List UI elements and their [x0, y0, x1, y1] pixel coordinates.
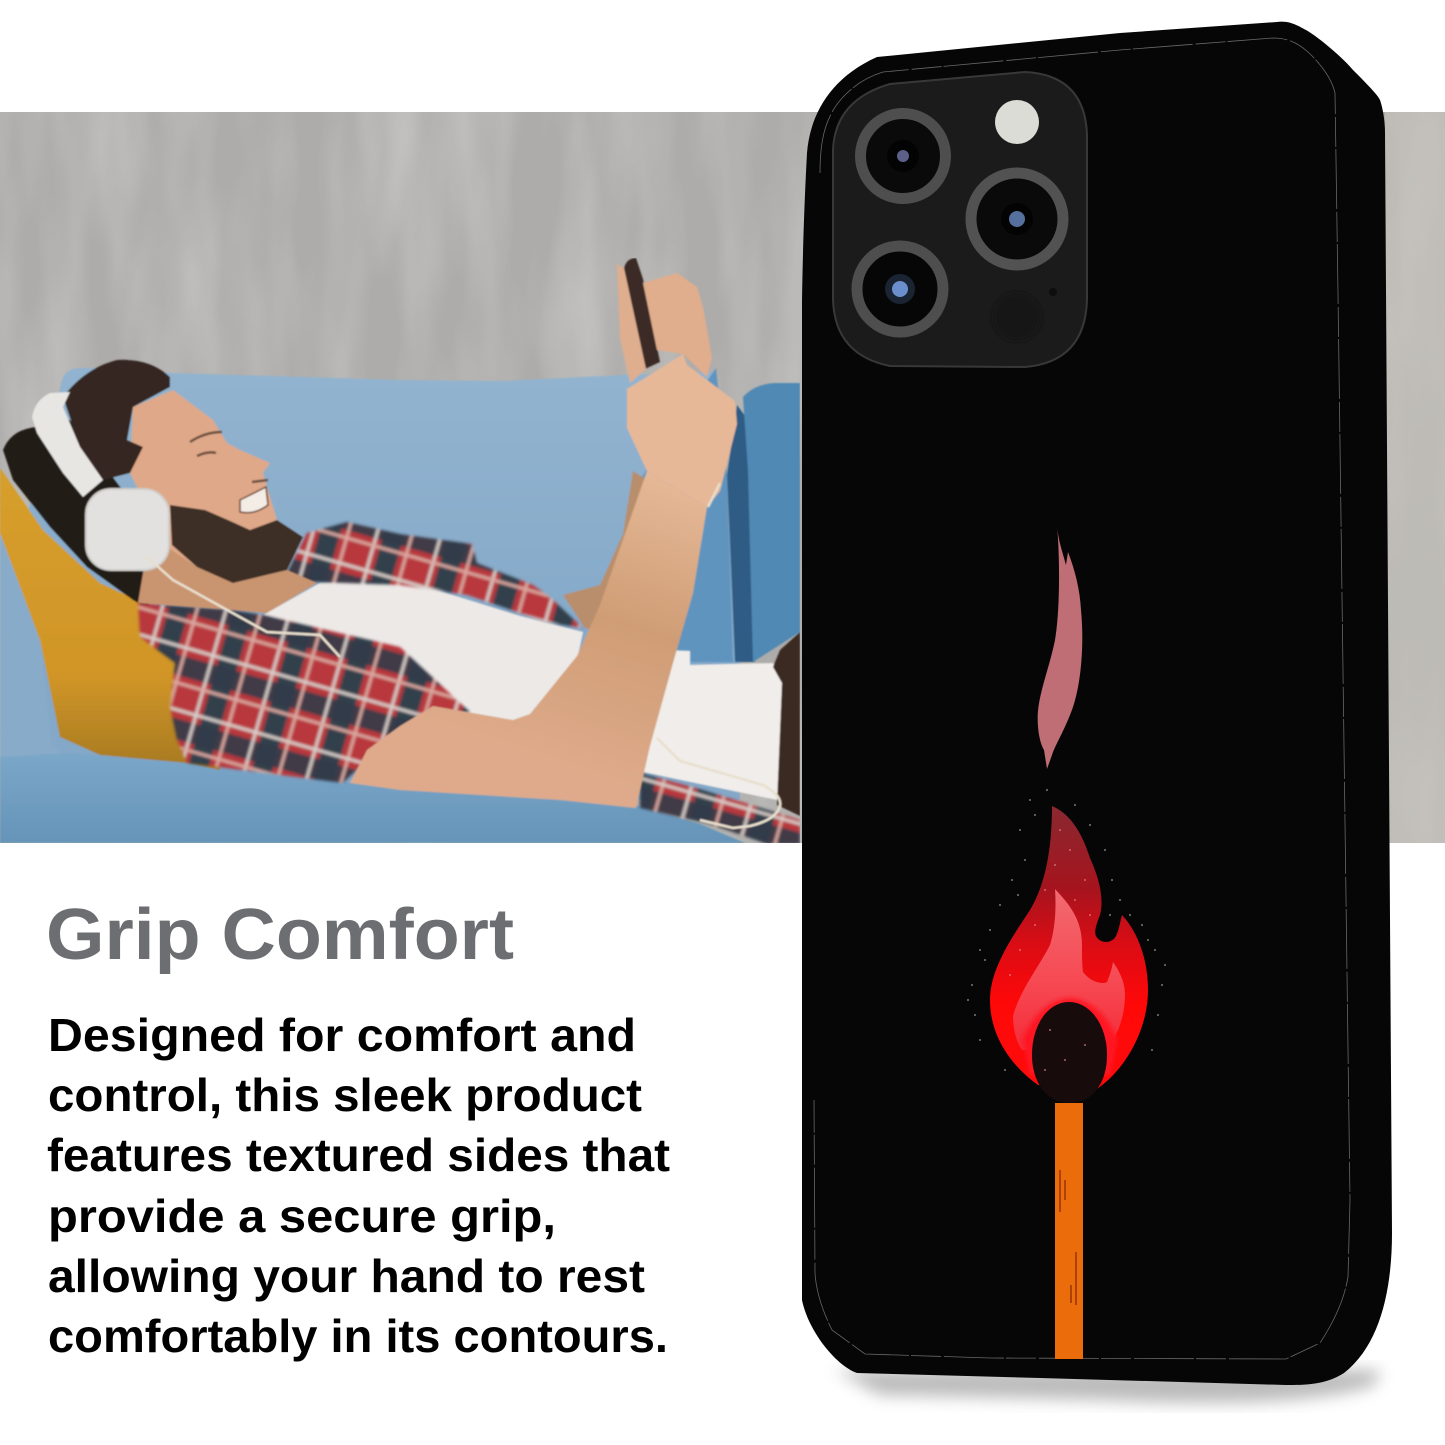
body text: allowing your hand to rest: [48, 1250, 645, 1302]
lens top left: [860, 114, 946, 198]
body text: features textured sides that: [47, 1129, 670, 1181]
lower hand: [627, 354, 737, 507]
sofa arm right: [743, 383, 800, 662]
earphone cable: [147, 483, 780, 828]
hair top: [63, 360, 170, 480]
case body: [802, 22, 1392, 1385]
concrete wall background: [0, 112, 1445, 843]
microphone: [1049, 288, 1057, 296]
white shirt chest: [263, 581, 584, 721]
arm: [350, 471, 707, 808]
lens bottom left: [857, 246, 943, 332]
flash: [995, 100, 1039, 144]
body text: control, this sleek product: [48, 1069, 642, 1121]
stitch outline of back panel: [814, 38, 1350, 1359]
face: [129, 390, 278, 565]
plaid sleeve: [138, 603, 470, 783]
body text: provide a secure grip,: [48, 1190, 556, 1242]
phone case: [802, 22, 1392, 1385]
yellow pillow: [0, 468, 220, 770]
far arm: [562, 470, 645, 630]
camera island: [833, 72, 1087, 367]
sofa side panel: [640, 368, 733, 662]
fingers: [643, 273, 712, 377]
sofa left arm: [0, 534, 14, 618]
neck: [138, 547, 317, 613]
mouth and teeth: [240, 487, 268, 513]
dark trousers: [773, 632, 800, 816]
body text: Designed for comfort and: [48, 1009, 636, 1061]
smoke flame: [1038, 524, 1082, 769]
stick grain marks: [1060, 1170, 1076, 1305]
palm behind phone: [617, 264, 646, 383]
phone in hand: [623, 258, 660, 369]
glow around match head: [1022, 998, 1118, 1075]
seat: [0, 753, 745, 843]
inner pink flame: [1013, 889, 1125, 1050]
plaid collar: [287, 522, 583, 628]
lidar sensor: [993, 293, 1041, 341]
phone case shadow: [835, 1370, 1380, 1403]
moustache and eye: [190, 432, 268, 482]
heading: Grip Comfort: [46, 895, 514, 975]
flame speckles: [1009, 829, 1091, 1071]
camera module: [833, 72, 1087, 367]
match stick: [1055, 1103, 1083, 1359]
body text: comfortably in its contours.: [48, 1310, 668, 1362]
dark hair behind head: [3, 420, 150, 610]
headband: [32, 392, 103, 497]
main flame: [990, 806, 1148, 1089]
lens right: [971, 173, 1063, 265]
photo: man relaxing on sofa with phone: [0, 112, 1445, 844]
beard: [170, 505, 303, 583]
sparks and embers: [967, 789, 1166, 1071]
plaid shirt tail: [640, 773, 800, 844]
match head: [1032, 1002, 1107, 1103]
white shirt hem: [643, 650, 782, 800]
man and sofa artwork: [0, 258, 800, 844]
sofa dark side gap: [727, 405, 755, 662]
artwork: burning match: [967, 524, 1166, 1359]
sofa back cushions: [0, 368, 740, 800]
body text: [47, 1009, 670, 1362]
ear cup: [86, 489, 169, 570]
